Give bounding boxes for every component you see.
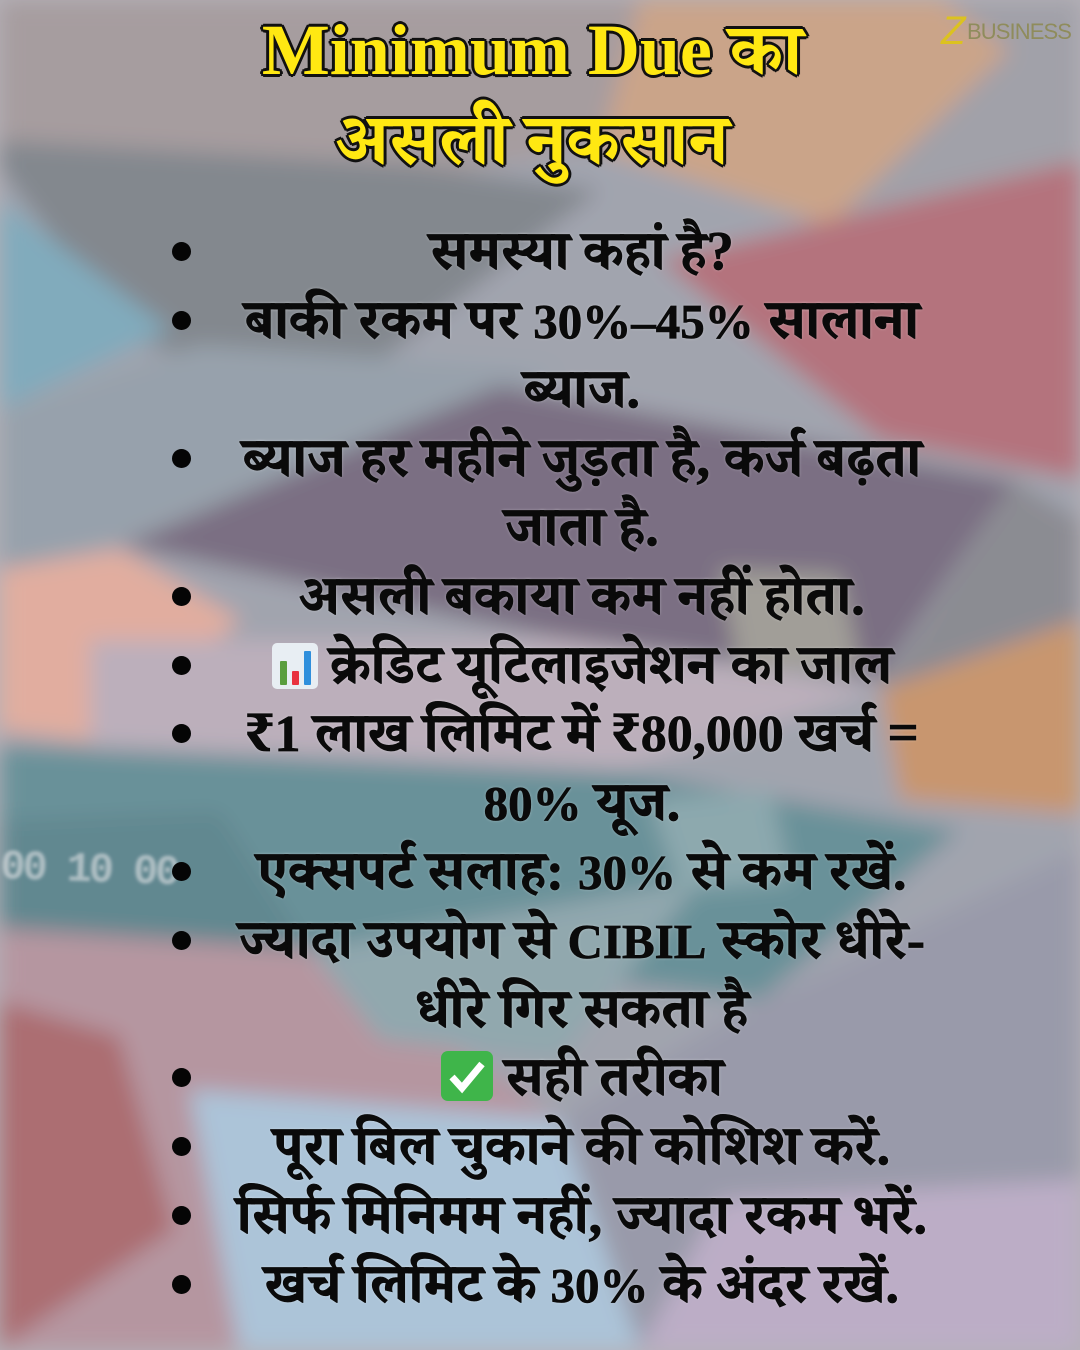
title <box>260 10 810 187</box>
logo: Z Business: BUSINESS <box>967 19 1071 44</box>
bullet list: ब्याज. <box>524 358 640 419</box>
bullet list: पूरा बिल चुकाने की कोशिश करें. <box>274 1115 890 1176</box>
title: असली नुकसान <box>336 100 728 180</box>
bullet list: ज्यादा उपयोग से CIBIL स्कोर धीरे- <box>239 909 925 970</box>
logo: Z Business: Z <box>941 9 965 53</box>
bullet list <box>172 218 927 1314</box>
bullet list: एक्सपर्ट सलाह: 30% से कम रखें. <box>257 840 907 901</box>
bullet list: समस्या कहां है? <box>430 220 734 281</box>
title: Minimum Due का <box>262 10 802 90</box>
bullet list: खर्च लिमिट के 30% के अंदर रखें. <box>265 1253 899 1314</box>
logo: Z Business <box>940 9 1071 53</box>
bullet list: धीरे गिर सकता है <box>416 978 748 1039</box>
bullet list: बाकी रकम पर 30%–45% सालाना <box>245 289 919 350</box>
bullet list: जाता है. <box>505 496 659 557</box>
bullet list: सिर्फ मिनिमम नहीं, ज्यादा रकम भरें. <box>237 1184 927 1245</box>
bullet list: सही तरीका <box>505 1046 723 1107</box>
bullet list: असली बकाया कम नहीं होता. <box>299 565 865 626</box>
bullet list: ब्याज हर महीने जुड़ता है, कर्ज बढ़ता <box>243 427 921 488</box>
bullet list: 80% यूज. <box>484 771 680 832</box>
background: blurred credit cards: 00 10 00 <box>0 843 181 897</box>
bullet list: क्रेडिट यूटिलाइजेशन का जाल <box>330 634 892 695</box>
bullet list: ₹1 लाख लिमिट में ₹80,000 खर्च = <box>245 702 919 763</box>
